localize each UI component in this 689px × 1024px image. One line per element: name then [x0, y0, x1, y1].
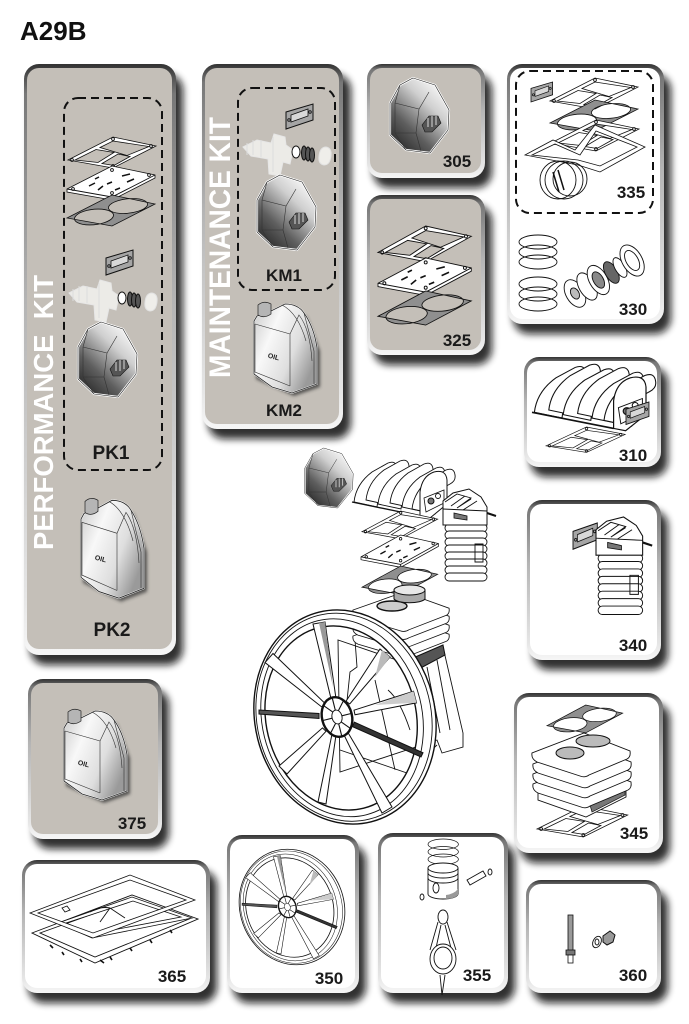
icon: gasket frames	[30, 875, 198, 968]
panel: 310	[524, 357, 668, 477]
dashed box: 335	[516, 71, 653, 213]
icon: oil can	[81, 498, 147, 602]
icon: lower gasket	[378, 291, 471, 325]
number: 325	[443, 331, 471, 350]
icon: gasket	[550, 78, 638, 109]
heading: performance kit: PERFORMANCE KIT	[28, 275, 59, 550]
icon: valve plate	[67, 166, 155, 200]
dashed box: PK1	[64, 98, 162, 470]
icon: filter cap	[390, 78, 449, 153]
icon: wide gasket	[525, 125, 645, 172]
main compressor illustration	[232, 448, 496, 844]
number: 355	[463, 966, 491, 985]
heading: maintenance kit: MAINTENANCE KIT	[204, 117, 237, 378]
panel: 345	[514, 693, 670, 863]
panel: performance kit	[24, 64, 183, 665]
icon: small cylinder	[443, 489, 496, 581]
number: 310	[619, 446, 647, 465]
icon: rings	[519, 277, 557, 311]
number: 305	[443, 152, 471, 171]
label: PK1: PK1	[93, 443, 130, 464]
number: 340	[619, 636, 647, 655]
icon: top gasket	[547, 705, 623, 733]
number: 375	[118, 814, 146, 833]
icon: valve plate	[378, 258, 471, 295]
icon: lower gasket	[67, 195, 155, 226]
icon: valve assembly	[69, 280, 157, 322]
icon: gasket lower	[551, 120, 639, 151]
number: 330: 330	[619, 300, 647, 319]
panel: 350	[226, 835, 366, 1003]
icon: cylinder head	[352, 460, 455, 518]
panel: 305	[367, 64, 492, 188]
icon: cylinder block	[532, 733, 631, 817]
icon: plate seals	[540, 161, 587, 199]
icon: plate	[361, 535, 438, 567]
icon: cylinder head	[532, 364, 656, 431]
panel: 335 and 330	[507, 64, 671, 334]
icon: valve assembly	[243, 134, 331, 176]
icon: piston rings	[428, 839, 458, 864]
icon: small gasket	[573, 523, 597, 549]
icon: flywheel	[226, 839, 358, 975]
icon: small gasket	[626, 402, 649, 424]
icon: nut and washer	[591, 931, 615, 949]
icon: filter cap	[78, 322, 137, 397]
number: 335: 335	[617, 183, 645, 202]
panel: 375	[28, 679, 169, 849]
number: 360	[619, 966, 647, 985]
icon: oil can: OIL	[94, 555, 108, 565]
number: 345	[620, 824, 648, 843]
icon: stud bolt	[566, 915, 575, 963]
icon: gasket	[546, 427, 625, 452]
label: PK2: PK2	[94, 620, 130, 641]
number: 365	[158, 967, 186, 986]
panel: 355	[378, 833, 515, 1003]
label: KM2: KM2	[266, 401, 302, 420]
icon: filter cap	[257, 175, 316, 250]
icon: filter cap	[305, 448, 353, 508]
icon: oil can: OIL	[77, 760, 91, 770]
title: A29B	[20, 16, 86, 46]
panel: maintenance kit	[202, 64, 351, 439]
icon: bottom gasket	[537, 806, 628, 837]
icon: grey gasket	[550, 100, 638, 131]
icon: top gasket	[378, 226, 471, 262]
icon: gasket	[362, 511, 438, 539]
icon: small gasket	[531, 82, 553, 102]
label: KM1: KM1	[266, 266, 302, 285]
panel: 340	[527, 500, 668, 670]
icon: flywheel	[232, 590, 458, 844]
panel: 360	[526, 880, 668, 1003]
icon: top gasket	[68, 137, 156, 168]
icon: connecting rod	[430, 910, 456, 995]
icon: oil can	[254, 302, 320, 396]
number: 350	[315, 969, 343, 988]
icon: cylinder block and crankcase	[338, 585, 463, 773]
icon: cylinder	[596, 517, 652, 615]
icon: oil can	[64, 709, 130, 803]
icon: small gasket	[106, 250, 133, 275]
dashed box: KM1	[238, 88, 335, 290]
icon: piston	[428, 863, 458, 899]
icon: small gasket	[286, 104, 313, 129]
icon: lower gasket	[362, 566, 438, 595]
icon: wrist pin	[420, 869, 492, 900]
panel: 325	[367, 195, 492, 365]
panel: 365	[22, 860, 217, 1003]
icon: rings	[519, 235, 557, 269]
icon: oil can: OIL	[267, 353, 281, 363]
icon: valve stack	[559, 241, 649, 313]
